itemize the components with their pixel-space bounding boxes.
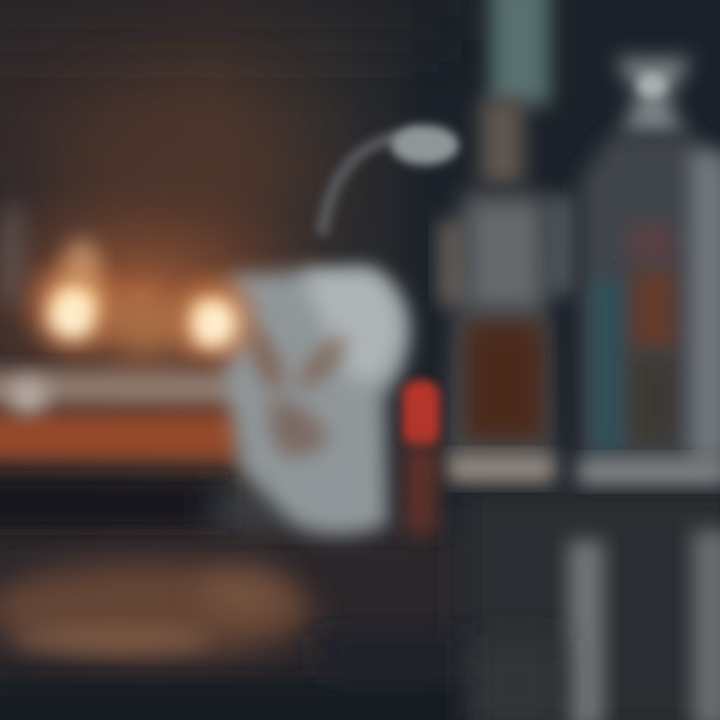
candle flames (15, 238, 268, 376)
kettle handle arc (322, 125, 459, 235)
warm halo behind candles (0, 170, 340, 420)
red bottle cap object (402, 380, 440, 535)
bottle reflections on table (470, 530, 720, 720)
mug: white body with handle and leaf print (225, 268, 410, 535)
table: dark base and reflections (0, 490, 720, 720)
bottle two: tall glass with stopper and teal and rust label (578, 58, 720, 484)
bottle one: clear body with amber liquid (438, 0, 574, 482)
icon: left pale smoke wisp (0, 200, 28, 310)
cake: cream layer, orange layer and dark base (0, 370, 330, 528)
